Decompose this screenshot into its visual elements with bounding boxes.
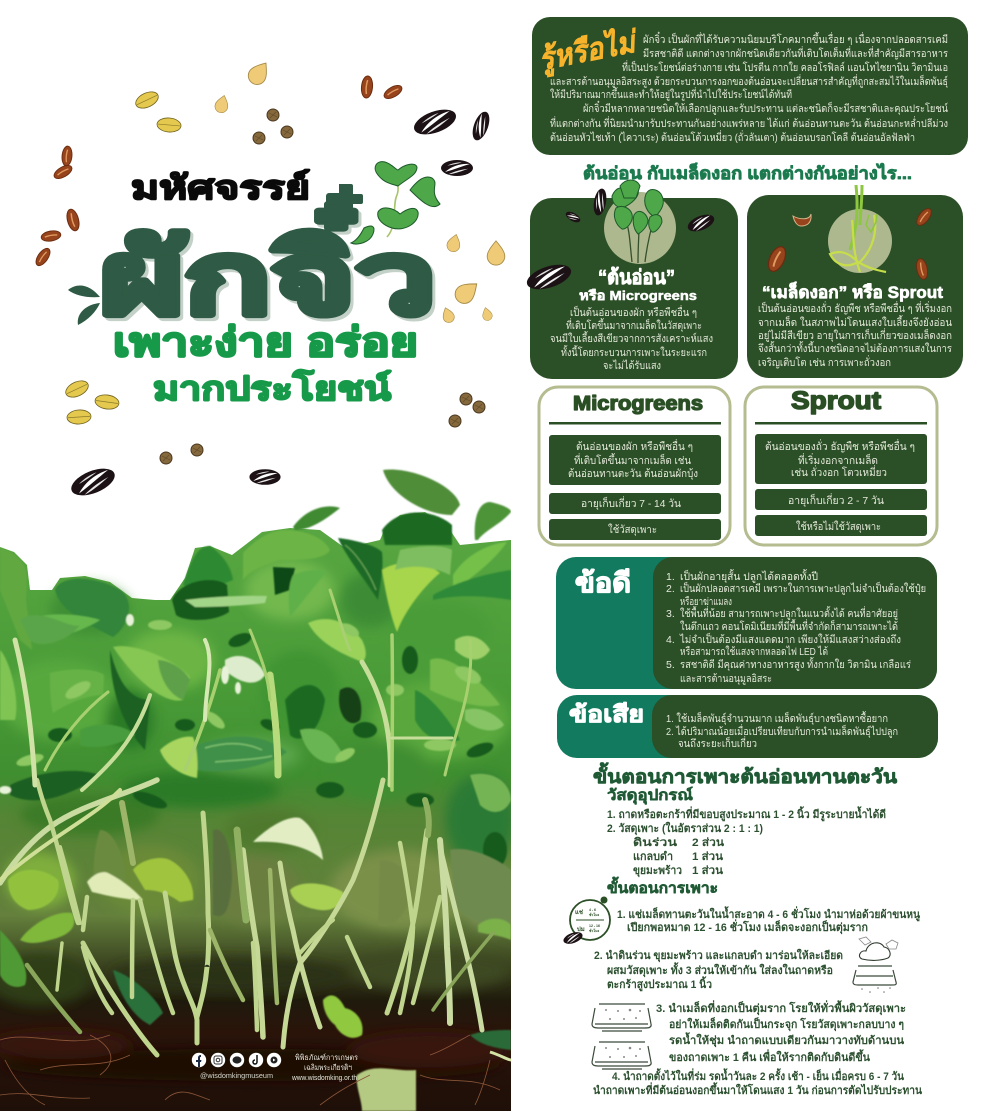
definition box — [549, 435, 721, 485]
growing medium box: ใช้วัสดุเพาะ — [608, 523, 657, 536]
title: ผักจิ๋ว: ผักจิ๋ว — [100, 204, 436, 335]
advantages list: ในตึกแถว คอนโดมิเนียมที่มีพื้นที่จำกัดก็สามารถเพาะได้ — [680, 619, 898, 633]
body text: ที่เติบโตขึ้นมาจากเมล็ดในวัสดุเพาะ — [566, 318, 702, 332]
definition box: ต้นอ่อนของถั่ว ธัญพืช หรือพืชอื่น ๆ — [765, 439, 915, 453]
growing medium box — [549, 519, 721, 540]
materials list: 1 ส่วน — [692, 865, 723, 877]
advantages list: 2. — [666, 583, 675, 595]
panel: disadvantages — [557, 695, 938, 758]
advantages list: 3. — [666, 608, 675, 620]
step 2: ผสมวัสดุเพาะ ทั้ง 3 ส่วนให้เข้ากัน ใส่ลงในถาดหรือ — [607, 962, 833, 978]
step 4: 4. นำถาดตั้งไว้ในที่ร่ม รดน้ำวันละ 2 ครั้ง เช้า - เย็น เมื่อครบ 6 - 7 วัน — [612, 1068, 904, 1083]
social icons and footer credit — [192, 1053, 358, 1082]
icon: seed tray top — [592, 1004, 651, 1031]
materials list — [607, 806, 886, 878]
panel: microgreens explanation — [524, 180, 738, 379]
title: ผักจิ๋ว: ผักจิ๋ว — [103, 207, 439, 338]
advantages list: เป็นผักปลอดสารเคมี เพราะในการเพาะปลูกไม่จำเป็นต้องใช้ปุ๋ย — [680, 581, 926, 595]
step 1 — [617, 906, 920, 935]
heading: รู้หรือไม่: รู้หรือไม่ — [536, 23, 642, 79]
advantages list: 1. — [666, 571, 675, 583]
materials list: แกลบดำ — [633, 850, 673, 863]
heading: ข้อดี: ข้อดี — [575, 568, 631, 598]
icon: soaking timer: ชั่วโมง — [589, 928, 600, 933]
step 1: เปียกพอหมาด 12 - 16 ชั่วโมง เมล็ดจะงอกเป็นตุ่มราก — [627, 919, 868, 935]
step 3: รดน้ำให้ชุ่ม นำถาดแบบเดียวกันมาวางทับด้านบน — [669, 1032, 904, 1048]
step 1: 1. แช่เมล็ดทานตะวันในน้ำสะอาด 4 - 6 ชั่วโมง นำมาห่อด้วยผ้าขนหนู — [617, 906, 920, 922]
materials list: 1 ส่วน — [692, 851, 723, 863]
intro text: ผักจิ๋วมีหลากหลายชนิดให้เลือกปลูกและรับประทาน แต่ละชนิดก็จะมีรสชาติและคุณประโยชน์ — [583, 100, 948, 115]
disadvantages list: 1. ใช้เมล็ดพันธุ์จำนวนมาก เมล็ดพันธุ์บางชนิดหาซื้อยาก — [666, 711, 888, 725]
step 3: ของถาดเพาะ 1 คืน เพื่อให้รากติดกับดินดีขึ้น — [669, 1049, 870, 1064]
upper leaves — [0, 469, 511, 868]
advantages list: 5. — [666, 659, 675, 671]
icon: microgreen sprout in circle — [604, 180, 676, 264]
icon: soaking timer: บ่ม — [577, 926, 585, 933]
body text — [758, 301, 952, 369]
step 4: นำถาดเพาะที่มีต้นอ่อนงอกขึ้นมาให้โดนแสง 1 วัน ก่อนการตัดไปรับประทาน — [593, 1082, 922, 1097]
disadvantages list — [666, 711, 898, 750]
harvest age box — [549, 493, 721, 514]
intro text: ผักจิ๋ว เป็นผักที่ได้รับความนิยมบริโภคมากขึ้นเรื่อย ๆ เนื่องจากปลอดสารเคมี — [643, 31, 948, 46]
definition box: ที่เริ่มงอกจากเมล็ด — [798, 453, 878, 467]
materials list: 1. ถาดหรือตะกร้าที่มีขอบสูงประมาณ 1 - 2 นิ้ว มีรูระบายน้ำได้ดี — [607, 806, 886, 822]
social icons and footer credit: พิพิธภัณฑ์การเกษตร — [295, 1053, 358, 1062]
scattered seeds around the title — [33, 58, 505, 501]
heading: materials: วัสดุอุปกรณ์ — [607, 786, 693, 805]
materials list: 2. วัสดุเพาะ (ในอัตราส่วน 2 : 1 : 1) — [607, 821, 763, 836]
card title: Sprout — [791, 387, 882, 415]
tagline: มากประโยชน์: มากประโยชน์ — [153, 369, 392, 407]
step 2 — [594, 948, 843, 992]
heading: difference question: ต้นอ่อน กับเมล็ดงอก แตกต่างกันอย่างไร... — [583, 161, 912, 183]
panel: microgreens comparison card — [539, 387, 730, 545]
materials list: ขุยมะพร้าว — [633, 864, 682, 878]
soil fibres — [0, 1035, 500, 1105]
social icons and footer credit: www.wisdomking.or.th — [291, 1073, 357, 1082]
heading: growing steps: ขั้นตอนการเพาะ — [607, 876, 718, 897]
advantages list: หรือสามารถใช้แสงจากหลอดไฟ LED ได้ — [680, 645, 828, 658]
body text: เจริญเติบโต เช่น การเพาะถั่วงอก — [758, 355, 891, 369]
intro text: ต้นอ่อนหัวไชเท้า (ไควาเระ) ต้นอ่อนโต้วเหมี่ยว (ถั่วลันเตา) ต้นอ่อนบรอกโคลี ต้นอ่อนอัลฟัลฟ่า — [550, 130, 915, 144]
panel: sprout comparison card — [745, 387, 937, 545]
icon: soil cloud over tray — [853, 937, 898, 993]
card title: Microgreens — [573, 393, 703, 415]
advantages list — [666, 569, 926, 685]
heading: ข้อเสีย: ข้อเสีย — [569, 701, 644, 727]
heading: “เมล็ดงอก” หรือ Sprout — [762, 280, 943, 302]
disadvantages list: จนถึงระยะเก็บเกี่ยว — [678, 736, 757, 750]
definition box: ที่เติบโตขึ้นมาจากเมล็ด เช่น — [574, 453, 691, 467]
materials list: 2 ส่วน — [692, 837, 725, 849]
body text: จะไม่ได้รับแสง — [603, 359, 661, 372]
tagline: เพาะง่าย อร่อย: เพาะง่าย อร่อย — [113, 321, 418, 365]
intro text: มีรสชาติดี แตกต่างจากผักชนิดเดียวกันที่เติบโตเต็มที่และที่สำคัญมีสารอาหาร — [643, 46, 948, 60]
body text: อยู่ไม่มีสีเขียว อายุในการเก็บเกี่ยวของเมล็ดงอก — [758, 328, 952, 342]
intro text: ให้มีปริมาณมากขึ้นและทำให้อยู่ในรูปที่นำไปใช้ประโยชน์ได้ทันที — [550, 87, 792, 101]
growing medium box — [755, 515, 927, 536]
social icons and footer credit: เฉลิมพระเกียรติฯ — [304, 1063, 352, 1072]
social icons and footer credit: @wisdomkingmuseum — [200, 1071, 273, 1080]
advantages list: ไม่จำเป็นต้องมีแสงแดดมาก เพียงให้มีแสงสว่างส่องถึง — [679, 632, 901, 646]
harvest age box: อายุเก็บเกี่ยว 7 - 14 วัน — [581, 496, 681, 510]
icon: plus mark — [326, 184, 363, 213]
definition box: ต้นอ่อนทานตะวัน ต้นอ่อนผักบุ้ง — [568, 468, 698, 480]
advantages list: เป็นผักอายุสั้น ปลูกได้ตลอดทั้งปี — [680, 569, 818, 583]
icon: seed tray bottom — [592, 1042, 651, 1069]
photo: microgreens growing from soil — [0, 469, 520, 1111]
definition box: ต้นอ่อนของผัก หรือพืชอื่น ๆ — [576, 439, 693, 453]
body text: เป็นต้นอ่อนของผัก หรือพืชอื่น ๆ — [570, 305, 697, 319]
intro text: ที่แตกต่างกัน ที่นิยมนำมารับประทานกันอย่างแพร่หลาย ได้แก่ ต้นอ่อนทานตะวัน ต้นอ่อนกะหล่ำปลีม่วง — [550, 116, 948, 130]
panel: did you know — [532, 17, 968, 155]
title: ผักจิ๋ว — [68, 204, 439, 338]
step 3 — [656, 1000, 906, 1064]
advantages list: 4. — [666, 634, 675, 646]
small mottled foliage — [15, 620, 484, 768]
panel: advantages — [556, 557, 937, 689]
icon: soaking timer: 4 - 6 — [589, 908, 596, 912]
body text: ทั้งนี้โดยกระบวนการเพาะในระยะแรก — [561, 345, 707, 359]
step 3: 3. นำเมล็ดที่งอกเป็นตุ่มราก โรยให้ทั่วพื้นผิววัสดุเพาะ — [656, 1000, 906, 1016]
heading: “ต้นอ่อน” — [598, 266, 675, 289]
title: มหัศจรรย์: มหัศจรรย์ — [131, 169, 310, 206]
icon: sprig with leaves — [351, 162, 440, 244]
materials list: ดินร่วน — [633, 836, 678, 849]
advantages list: หรือยาฆ่าแมลง — [680, 595, 732, 608]
body text: จนมีใบเลี้ยงสีเขียวจากการสังเคราะห์แสง — [550, 331, 713, 345]
step 4 — [593, 1068, 922, 1097]
body text — [550, 305, 713, 372]
icon: bean sprout in circle — [828, 185, 892, 273]
heading: sunflower sprout method: ขั้นตอนการเพาะต้นอ่อนทานตะวัน — [593, 762, 897, 788]
disadvantages list: 2. ได้ปริมาณน้อยเมื่อเปรียบเทียบกับการนำเมล็ดพันธุ์ไปปลูก — [666, 724, 898, 738]
body text: จึงสั้นกว่าทั้งนี้บางชนิดอาจไม่ต้องการแสงในการ — [758, 341, 952, 355]
step 3: อย่าให้เมล็ดติดกันเป็นกระจุก โรยวัสดุเพาะกลบบาง ๆ — [669, 1017, 904, 1032]
icon: soaking timer: แช่ — [575, 909, 583, 916]
panel: microgreens explanation: หรือ Microgreens — [579, 288, 697, 303]
materials section — [607, 786, 886, 878]
harvest age box: อายุเก็บเกี่ยว 2 - 7 วัน — [788, 493, 884, 507]
lower leaves — [0, 817, 511, 1111]
intro text: ที่เป็นประโยชน์ต่อร่างกาย เช่น โปรตีน กากใย คลอโรฟิลล์ แอนโทไซยานิน วิตามินเอ — [622, 60, 948, 74]
definition box: เช่น ถั่วงอก โตวเหมี่ยว — [791, 465, 887, 479]
advantages list: รสชาติดี มีคุณค่าทางอาหารสูง ทั้งกากใย วิตามิน เกลือแร่ — [680, 657, 911, 671]
icon: soaking timer: 12 - 16 — [589, 924, 600, 928]
icon: soaking timer — [562, 896, 610, 946]
intro text — [550, 31, 948, 144]
icon: soaking timer: ชั่วโมง — [589, 912, 600, 917]
foliage mass — [0, 512, 512, 1111]
harvest age box — [755, 489, 927, 510]
body text: จากเมล็ด ในสภาพไม่โดนแสงใบเลี้ยงจึงยังอ่อน — [758, 315, 952, 329]
panel: sprout explanation — [747, 185, 963, 378]
advantages list: และสารต้านอนุมูลอิสระ — [680, 673, 772, 685]
step 2: ตะกร้าสูงประมาณ 1 นิ้ว — [607, 976, 712, 992]
advantages list: ใช้พื้นที่น้อย สามารถเพาะปลูกในแนวตั้งได้ คนที่อาศัยอยู่ — [680, 606, 898, 620]
body text: เป็นต้นอ่อนของถั่ว ธัญพืช หรือพืชอื่น ๆ ที่เริ่มงอก — [758, 301, 952, 315]
growing medium box: ใช้หรือไม่ใช้วัสดุเพาะ — [796, 520, 881, 533]
stems — [0, 590, 493, 1055]
step 2: 2. นำดินร่วน ขุยมะพร้าว และแกลบดำ มาร่อนให้ละเอียด — [594, 948, 843, 963]
definition box — [755, 434, 927, 484]
